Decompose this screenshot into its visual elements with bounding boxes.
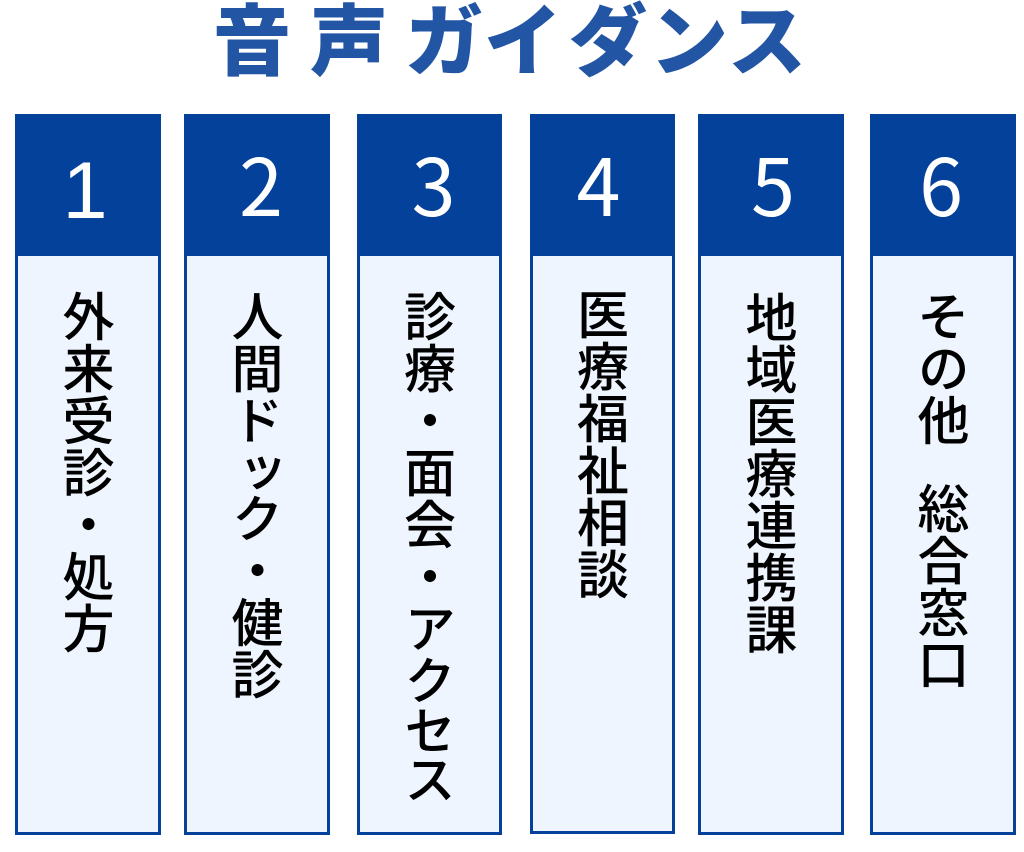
panel: 1 外来受診・処方 xyxy=(15,114,161,835)
panel: 6 その他 総合窓口 xyxy=(870,114,1016,835)
panel: 5 地域医療連携課: 5 xyxy=(751,124,795,239)
panel: 2 人間ドック・健診: 2 xyxy=(239,124,283,239)
panel: 5 地域医療連携課 xyxy=(698,114,844,835)
panel: 4 医療福祉相談: 医療福祉相談 xyxy=(566,288,640,600)
panel: 3 診療・面会・アクセス: 3 xyxy=(412,124,455,239)
panel: 2 人間ドック・健診: 人間ド ッ ク・健診 xyxy=(220,290,295,700)
panel: 5 地域医療連携課: 地域医療連携課 xyxy=(734,291,809,655)
panel: 3 診療・面会・アクセス: 診療・面会・ア ク セ ス xyxy=(392,290,468,805)
panel: 4 医療福祉相談: 4 xyxy=(577,124,620,239)
panel: 6 その他 総合窓口: 6 xyxy=(919,124,963,239)
panel: 1 外来受診・処方: 1 xyxy=(62,146,108,236)
panel: 1 外来受診・処方: 外来受診・処方 xyxy=(51,290,126,654)
panel: 6 その他 総合窓口: その他 総合窓口 xyxy=(906,290,981,690)
panel: 2 人間ドック・健診 xyxy=(184,114,330,835)
panel: 4 医療福祉相談 xyxy=(530,114,675,834)
panel: 3 診療・面会・アクセス xyxy=(357,114,502,835)
title xyxy=(213,0,806,92)
